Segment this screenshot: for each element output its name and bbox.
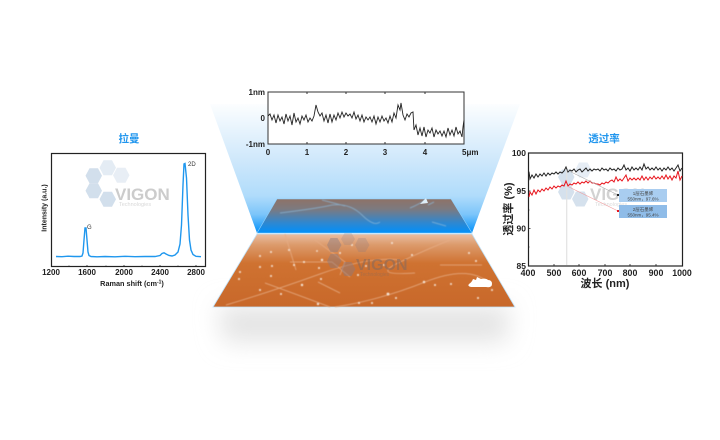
transmittance axis labels: 85: [517, 261, 526, 271]
transmittance axis labels: 90: [517, 224, 526, 234]
Raman trace: [56, 164, 201, 257]
watermark: left: VIGON: [115, 185, 170, 204]
red trace: [529, 171, 682, 197]
profile axis labels: [246, 88, 478, 157]
blue light funnel: [210, 104, 520, 233]
transmittance chart: 波长 (nm): [581, 276, 630, 290]
Raman chart: ): [161, 279, 164, 288]
Raman axis labels: 1200: [42, 268, 60, 277]
callout: double layer: [619, 205, 667, 218]
profile axis labels: -1nm: [246, 140, 265, 149]
height profile chart: [268, 92, 464, 144]
transmittance axis labels: 100: [512, 148, 526, 158]
Raman chart: -1: [157, 280, 162, 286]
profile axis labels: 0: [266, 148, 271, 157]
profile axis labels: 0: [261, 114, 266, 123]
transmittance chart: 600: [572, 268, 586, 278]
peak labels: G: [87, 225, 92, 231]
guide line at 550 nm: [566, 170, 568, 265]
watermark: centre: Technologies: [360, 272, 390, 278]
floor shadow: [218, 306, 510, 342]
Raman chart: [42, 154, 206, 288]
profile axis labels: 4: [423, 148, 428, 157]
Raman chart: Intensity (a.u.): [42, 184, 48, 232]
transmittance chart: 900: [649, 268, 663, 278]
watermark: right: VIGON: [590, 185, 645, 204]
watermark: centre: [327, 233, 408, 278]
profile axis labels: 2: [344, 148, 349, 157]
watermark: right: [558, 162, 645, 208]
callout leader lines: [567, 170, 619, 212]
watermark: left: [86, 160, 170, 208]
profile trace: [268, 103, 464, 137]
Raman axis labels: 2000: [115, 268, 133, 277]
profile axis labels: 1: [305, 148, 310, 157]
upper AFM surface: [257, 198, 472, 233]
profile axis labels: 3: [383, 148, 388, 157]
transmittance axis labels: [512, 148, 526, 271]
Raman axis labels: [42, 268, 205, 277]
callout: single layer: [619, 189, 667, 202]
profile axis labels: 1nm: [249, 88, 265, 97]
heading: Raman: 拉曼: [118, 132, 140, 145]
transmittance axis labels: 95: [517, 186, 526, 196]
watermark: right: Technologies: [595, 202, 627, 208]
transmittance chart: [501, 148, 692, 290]
Raman axis labels: 1600: [78, 268, 96, 277]
profile axis labels: 5μm: [462, 148, 478, 157]
watermark: centre: VIGON: [356, 257, 408, 274]
callout: double layer: 2层石墨烯: [633, 206, 654, 213]
heading: transmittance: 透过率: [588, 132, 620, 145]
transmittance chart: 500: [547, 268, 561, 278]
Raman chart: 2D: [188, 162, 196, 168]
transmittance chart: 800: [623, 268, 637, 278]
plot frame: [52, 154, 206, 266]
plot frame: [528, 153, 682, 266]
black trace: [529, 164, 682, 179]
Raman axis labels: 2800: [187, 268, 205, 277]
callout: double layer: 550nm，95.4%: [627, 212, 659, 218]
watermark: left: Technologies: [119, 202, 151, 208]
callout: single layer: 1层石墨烯: [633, 190, 654, 197]
callout: single layer: 550nm，97.6%: [627, 196, 659, 202]
Raman axis labels: 2400: [151, 268, 169, 277]
lower AFM surface: [213, 234, 515, 307]
transmittance chart: 1000: [672, 268, 692, 278]
transmittance chart: 700: [598, 268, 612, 278]
Raman chart: Raman shift (cm: [100, 279, 157, 288]
transmittance chart: 400: [521, 268, 535, 278]
transmittance chart: 透过率 (%): [501, 182, 515, 236]
